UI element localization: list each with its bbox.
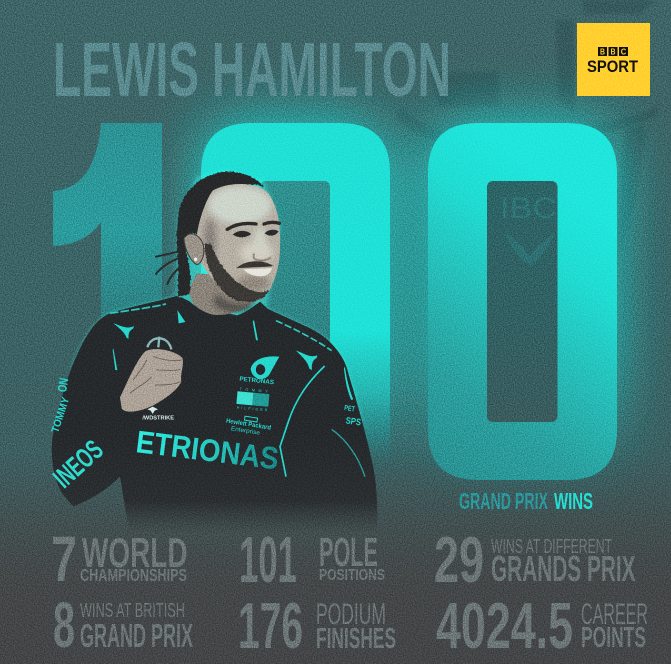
eyes: [233, 230, 279, 237]
SPORT wordmark: SPORT: [587, 57, 639, 76]
sleeve logos right: PET: [344, 403, 356, 414]
BBC blocks: B: [610, 48, 616, 56]
Hewlett Packard Enterprise: [224, 413, 272, 438]
WD Strike: /WDSTRIKE: [142, 415, 174, 421]
stat: wins at different grands prix: [434, 523, 636, 596]
face base: [196, 184, 280, 296]
earring: [194, 258, 197, 261]
caption accent: WINS: [554, 488, 593, 514]
shoulder seam left: [110, 304, 166, 313]
stat: pole positions: POLE: [319, 529, 378, 575]
stat: podium finishes: 176: [238, 589, 303, 662]
Tommy Hilfiger flag: TOMMY: [240, 387, 268, 394]
stat: world championships: 7: [51, 523, 77, 595]
fist: [120, 349, 183, 412]
Mercedes star arc: [147, 337, 171, 349]
BBC Sport logo: [577, 23, 650, 96]
face: [196, 184, 280, 296]
moustache: [236, 261, 273, 268]
Tommy Hilfiger flag: HILFIGER: [237, 406, 268, 412]
cheek highlight: [240, 241, 273, 264]
eyebrows: [227, 222, 279, 229]
stat: wins at British Grand Prix: 8: [53, 589, 75, 661]
number glow: [196, 118, 622, 458]
INEOS sleeve: INEOS: [47, 434, 109, 494]
forearm detail right: [332, 429, 365, 477]
puma logo left: [113, 323, 134, 339]
puma logo right: [296, 351, 317, 370]
Tommy Hilfiger flag: [236, 387, 270, 412]
ghost bird: [505, 232, 555, 265]
stat: podium finishes: FINISHES: [316, 623, 396, 655]
first digit 0: [201, 123, 390, 470]
big number 100: [53, 123, 617, 480]
stat: world championships: WORLD: [82, 529, 188, 576]
BBC blocks: B: [600, 48, 605, 56]
stat: world championships: CHAMPIONSHIPS: [80, 565, 187, 585]
stat: wins at British Grand Prix: GRAND PRIX: [80, 617, 193, 654]
ear: [184, 234, 204, 265]
chin tone: [237, 275, 270, 291]
second zero counter shade: [487, 181, 558, 422]
nose highlight: [254, 227, 266, 253]
ghost label: IBC: [500, 192, 557, 225]
BBC blocks: C: [621, 48, 627, 56]
WD Strike: [142, 407, 174, 421]
beard: [205, 243, 269, 302]
suit collar: [180, 297, 267, 333]
stat: podium finishes: PODIUM: [316, 598, 386, 631]
collar logos: [177, 310, 185, 323]
caption: Grand Prix wins: [459, 488, 593, 514]
ghosted helmet background: [396, 0, 660, 268]
suit logos: TOMMY: [49, 396, 72, 434]
smile: [243, 268, 272, 276]
stat: wins at British Grand Prix: [53, 589, 193, 661]
figure glow: [72, 170, 363, 427]
temple shade: [204, 218, 216, 265]
PETRONAS chest text: PETRONAS: [239, 376, 274, 386]
suit seam: [280, 366, 325, 477]
neck: [189, 273, 263, 315]
stat: pole positions: 101: [239, 523, 297, 596]
second digit 0: [428, 123, 617, 480]
suit logos: [47, 304, 365, 494]
ghost crest inside zero: [500, 192, 557, 265]
neck shadow: [213, 293, 260, 312]
Hewlett Packard Enterprise: Hewlett Packard: [226, 418, 272, 432]
stat: wins at British Grand Prix: WINS AT BRITISH: [80, 600, 185, 622]
forehead highlight: [208, 186, 272, 224]
hair: [177, 172, 264, 297]
shoulder seam right: [276, 321, 332, 351]
suit logos: SPS: [345, 415, 362, 427]
Hewlett Packard Enterprise: Enterprise: [230, 426, 261, 437]
stat: pole positions: POSITIONS: [319, 567, 385, 584]
first zero counter shade: [260, 181, 330, 471]
sleeve logos left: ON: [55, 377, 71, 393]
race suit: [52, 296, 377, 537]
finger creases: [130, 357, 182, 393]
dreadlocks: [156, 252, 180, 284]
BBC blocks: [598, 47, 628, 56]
stat: world championships: [51, 523, 188, 595]
caption label: GRAND PRIX: [459, 488, 548, 514]
stat: career points: 4024.5: [436, 589, 573, 662]
stat: podium finishes: [238, 589, 396, 662]
digit 1: [53, 123, 162, 480]
nose: [253, 253, 271, 261]
Lewis Hamilton figure: [47, 170, 377, 537]
stat: wins at different grands prix: 29: [434, 523, 484, 596]
Mercedes Petronas emblem: [251, 356, 279, 379]
PETRONAS main sponsor: ETRIONAS: [134, 424, 281, 476]
